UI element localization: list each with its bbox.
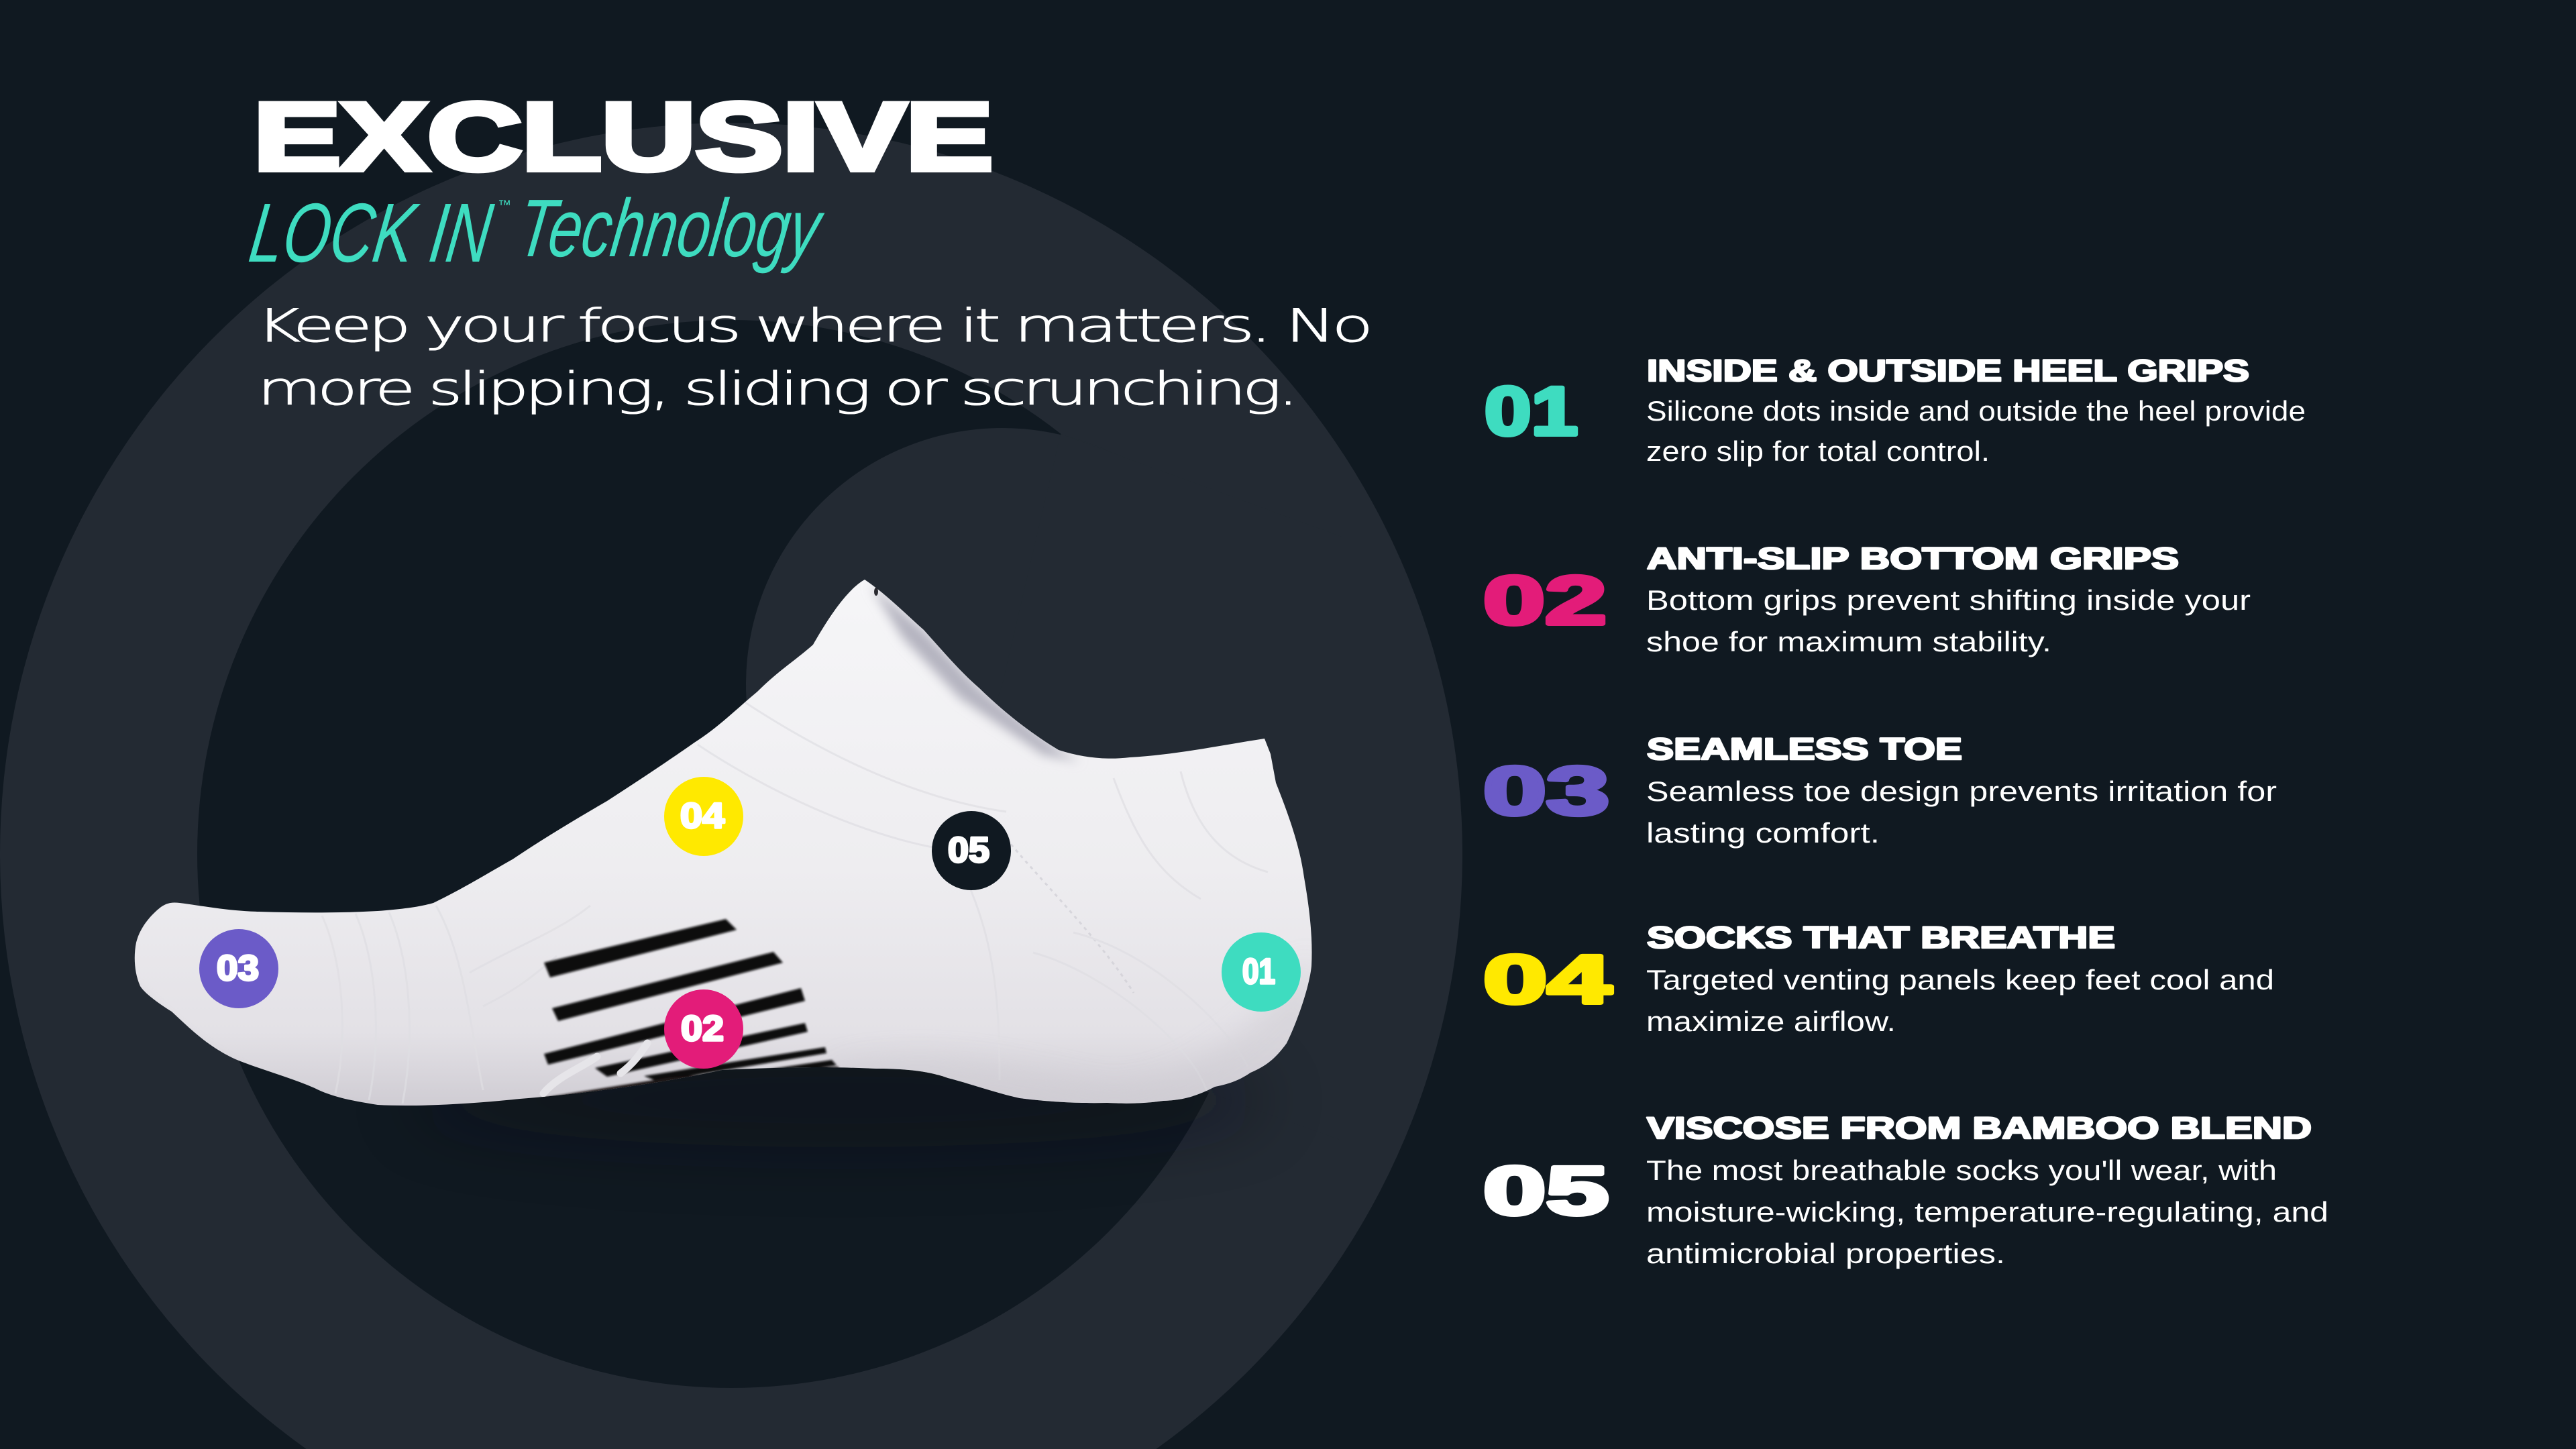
script subtitle: Technology bbox=[513, 182, 829, 274]
feature 01: 01 bbox=[1485, 373, 1578, 449]
feature 04: Targeted venting panels keep feet cool and bbox=[1646, 964, 2274, 996]
braided grip detail bbox=[543, 1043, 647, 1093]
feature 04 bbox=[1483, 920, 2274, 1037]
feature 03: Seamless toe design prevents irritation for bbox=[1646, 775, 2277, 807]
feature 01 bbox=[1485, 354, 2306, 467]
collar inner fold bbox=[869, 584, 1080, 761]
background ring graphic bbox=[0, 123, 1462, 1449]
marker 03 bbox=[199, 929, 278, 1008]
feature 05: moisture-wicking, temperature-regulating, and bbox=[1646, 1196, 2328, 1228]
intro text: more slipping, sliding or scrunching. bbox=[258, 363, 1295, 416]
feature 02: 02 bbox=[1483, 562, 1607, 639]
knit ribs bbox=[322, 698, 1268, 1104]
feature 03 bbox=[1483, 732, 2277, 849]
feature 04: maximize airflow. bbox=[1646, 1006, 1896, 1037]
title: EXCLUSIVE bbox=[254, 84, 993, 191]
feature 05: antimicrobial properties. bbox=[1646, 1238, 2005, 1269]
lilac under-shading bbox=[840, 981, 1309, 1104]
feature 02: Bottom grips prevent shifting inside your bbox=[1646, 584, 2251, 616]
script subtitle bbox=[244, 182, 829, 280]
marker 04: 04 bbox=[680, 796, 725, 836]
marker 05: 05 bbox=[948, 830, 989, 870]
feature 05 bbox=[1483, 1111, 2328, 1269]
feature 02: ANTI-SLIP BOTTOM GRIPS bbox=[1647, 541, 2179, 576]
sock illustration bbox=[121, 570, 1335, 1127]
marker 02 bbox=[664, 989, 743, 1069]
feature 05: 05 bbox=[1483, 1152, 1609, 1229]
script subtitle: LOCK IN bbox=[244, 186, 498, 280]
marker 02: 02 bbox=[681, 1009, 724, 1049]
feature 04: 04 bbox=[1483, 941, 1611, 1018]
toe shading bbox=[134, 986, 376, 1114]
marker 01: 01 bbox=[1242, 952, 1275, 991]
feature 03: SEAMLESS TOE bbox=[1647, 732, 1962, 766]
intro text: Keep your focus where it matters. No bbox=[256, 300, 1369, 353]
collar eyelet dot bbox=[874, 588, 878, 596]
feature 02: shoe for maximum stability. bbox=[1646, 626, 2051, 657]
feature 02 bbox=[1483, 541, 2251, 657]
marker 05 bbox=[932, 811, 1011, 890]
intro text bbox=[256, 300, 1369, 416]
feature 03: 03 bbox=[1483, 753, 1609, 829]
feature 01: INSIDE & OUTSIDE HEEL GRIPS bbox=[1647, 354, 2249, 388]
marker 04 bbox=[664, 777, 743, 856]
feature 05: VISCOSE FROM BAMBOO BLEND bbox=[1647, 1111, 2312, 1145]
feature 01: Silicone dots inside and outside the heel provide bbox=[1646, 395, 2306, 427]
anti-slip grip bars bbox=[520, 919, 839, 1107]
feature 05: The most breathable socks you'll wear, with bbox=[1646, 1155, 2277, 1186]
script subtitle: ™ bbox=[498, 198, 511, 213]
feature 04: SOCKS THAT BREATHE bbox=[1647, 920, 2115, 955]
marker 03: 03 bbox=[217, 949, 259, 988]
marker 01 bbox=[1222, 932, 1301, 1012]
feature 01: zero slip for total control. bbox=[1646, 435, 1990, 467]
feature 03: lasting comfort. bbox=[1646, 817, 1880, 849]
sock drop shadow bbox=[409, 1053, 1268, 1147]
